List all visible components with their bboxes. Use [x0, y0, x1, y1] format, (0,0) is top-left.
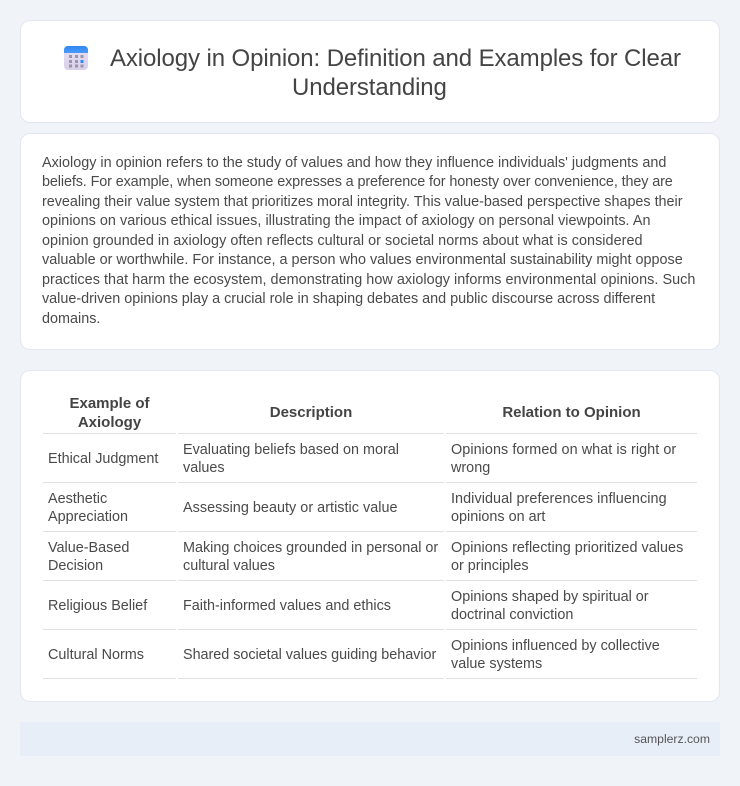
text block: definition paragraph: valuable or worthwhile. For instance, a person who values environmental sustainability might oppose — [42, 252, 683, 268]
table row: Aesthetic Appreciation: Individual preferences influencing — [451, 491, 667, 507]
table row: Religious Belief — [48, 589, 649, 623]
table row: Religious Belief: doctrinal conviction — [451, 607, 573, 623]
table row: Cultural Norms: Shared societal values guiding behavior — [183, 647, 436, 663]
text block: definition paragraph: beliefs. For example, when someone expresses a preference for honesty over convenience, they are — [42, 174, 673, 190]
table row: Value-Based Decision: cultural values — [183, 558, 275, 574]
table header: Axiology — [78, 414, 141, 431]
table row: Religious Belief: Religious Belief — [48, 598, 147, 614]
table row: Aesthetic Appreciation: Assessing beauty or artistic value — [183, 500, 398, 516]
table row: Ethical Judgment: wrong — [451, 460, 490, 476]
table row: Value-Based Decision: Making choices grounded in personal or — [183, 540, 438, 556]
table row: Aesthetic Appreciation: Appreciation — [48, 509, 128, 525]
table row: Ethical Judgment: Opinions formed on what is right or — [451, 442, 676, 458]
text block: definition paragraph: opinion grounded in axiology often reflects cultural or societal norms about what is considered — [42, 233, 643, 249]
text block: definition paragraph: Axiology in opinion refers to the study of values and how they influence individuals' judgments and — [42, 155, 666, 171]
table header — [69, 395, 641, 431]
table row: Religious Belief: Faith-informed values and ethics — [183, 598, 391, 614]
table row: Aesthetic Appreciation — [48, 491, 667, 525]
table row: Value-Based Decision: Decision — [48, 558, 103, 574]
text block: definition paragraph: value-driven opinions play a crucial role in shaping debates and public discourse across different — [42, 291, 655, 307]
table row: Cultural Norms: value systems — [451, 656, 542, 672]
table row: Value-Based Decision: Value-Based — [48, 540, 129, 556]
table row: Cultural Norms — [48, 638, 660, 672]
table row: Value-Based Decision: or principles — [451, 558, 529, 574]
title: Understanding — [292, 74, 447, 101]
panel: intro paragraph — [20, 133, 720, 350]
table row: Ethical Judgment: Evaluating beliefs based on moral — [183, 442, 399, 458]
table header: Relation to Opinion — [502, 404, 641, 421]
title: Axiology in Opinion: Definition and Examples for Clear — [110, 45, 681, 72]
table row: Cultural Norms: Cultural Norms — [48, 647, 144, 663]
icon: calendar — [64, 46, 88, 70]
text block: definition paragraph: revealing their value system that prioritizes moral integrity. This value-based perspective shapes their — [42, 194, 682, 210]
table row: Ethical Judgment — [48, 442, 676, 476]
table row: Ethical Judgment: Ethical Judgment — [48, 451, 158, 467]
text block: definition paragraph: opinions on various ethical issues, illustrating the impact of axiology on personal viewpoints. An — [42, 213, 650, 229]
table row: Aesthetic Appreciation: Aesthetic — [48, 491, 107, 507]
text block: definition paragraph: domains. — [42, 311, 100, 327]
table header: Description — [270, 404, 352, 421]
panel: examples table — [20, 370, 720, 702]
text block: definition paragraph: practices that harm the ecosystem, demonstrating how axiology informs environmental opinions. Such — [42, 272, 695, 288]
table row: Cultural Norms: Opinions influenced by collective — [451, 638, 660, 654]
table row: Value-Based Decision: Opinions reflecting prioritized values — [451, 540, 683, 556]
footer text: site name: samplerz.com — [634, 732, 710, 746]
footer bar — [20, 722, 720, 756]
title — [110, 45, 681, 101]
text block: definition paragraph — [42, 155, 695, 327]
header panel — [20, 20, 720, 123]
table row: Aesthetic Appreciation: opinions on art — [451, 509, 545, 525]
table row: Value-Based Decision — [48, 540, 683, 574]
table row: Ethical Judgment: values — [183, 460, 225, 476]
table row: Religious Belief: Opinions shaped by spiritual or — [451, 589, 649, 605]
table header: Example of — [69, 395, 150, 412]
